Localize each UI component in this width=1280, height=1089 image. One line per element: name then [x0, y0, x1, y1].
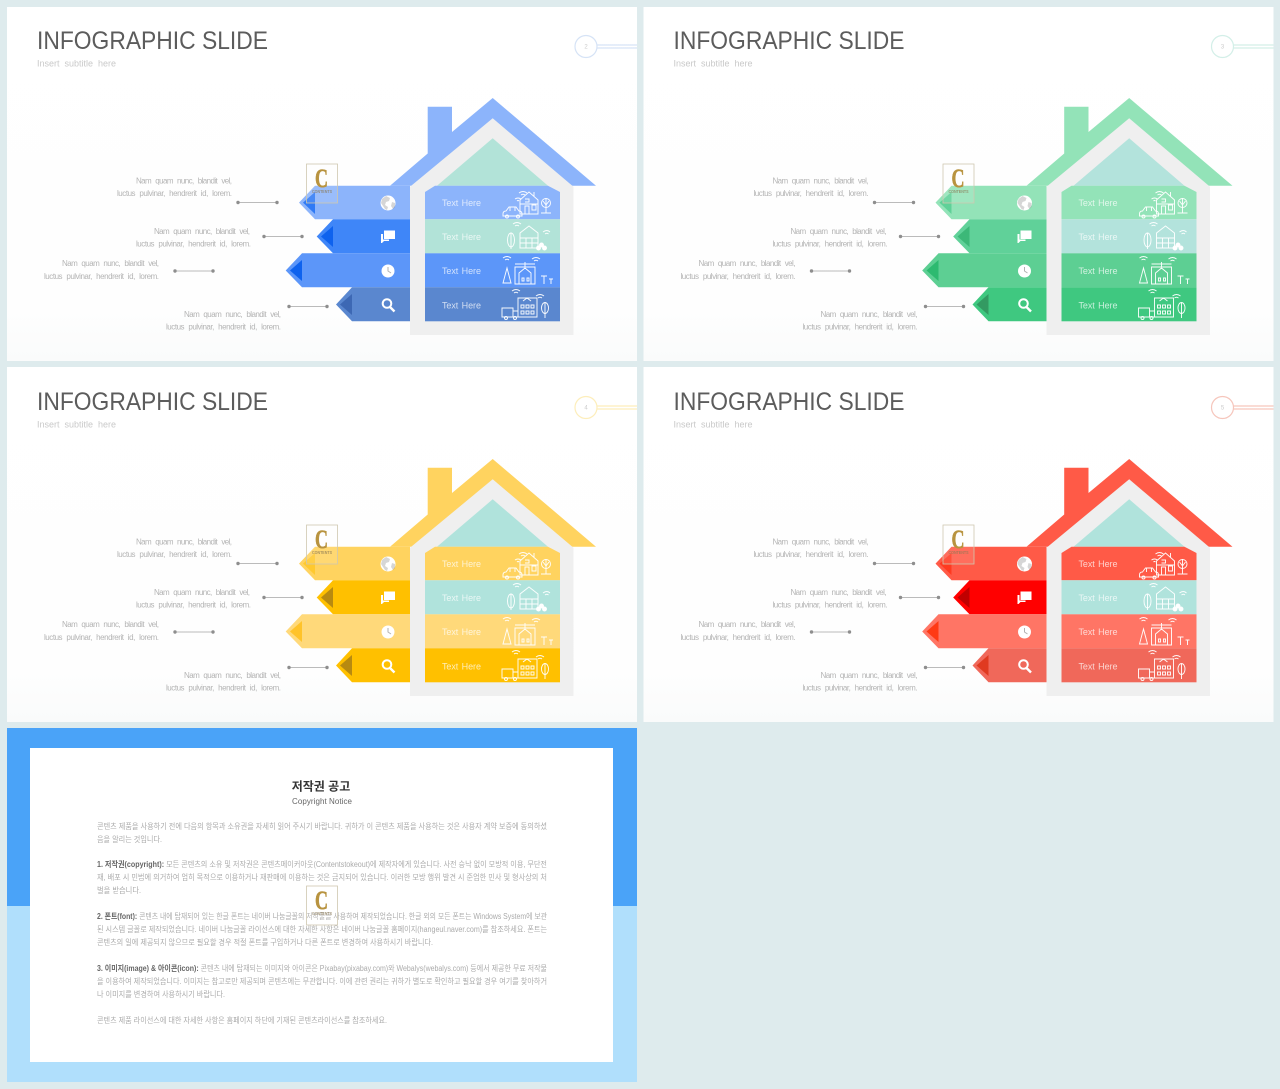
arrow 4: [972, 648, 1046, 682]
watermark badge: [306, 164, 338, 203]
arrow 3: [286, 253, 410, 287]
arrow 2: [953, 580, 1046, 614]
intro paragraph: 음을 알리는 것입니다.: [97, 834, 162, 844]
watermark badge: CONTENTS: [312, 550, 332, 555]
arrow 3: [922, 253, 1046, 287]
house row 3: [1062, 614, 1196, 648]
house row 4: [425, 648, 560, 682]
watermark badge: C: [315, 164, 328, 193]
house row 2: [1062, 580, 1196, 614]
watermark badge: [306, 525, 338, 564]
attic triangle: [1074, 499, 1184, 547]
callout 3: Nam quam nunc, blandit vel,: [62, 620, 159, 629]
attic triangle: [437, 138, 548, 186]
section 1 copyright: 벌을 받습니다.: [97, 885, 141, 895]
copyright heading: 저작권 공고: [292, 778, 350, 794]
house row 2: Text Here: [442, 232, 481, 242]
callout 4: [166, 305, 329, 332]
watermark badge: C: [952, 525, 964, 554]
house row 1: [1062, 547, 1196, 580]
watermark badge: [306, 886, 338, 925]
arrow 4: [336, 648, 410, 682]
subtitle: Insert subtitle here: [37, 58, 116, 68]
panel: blue house slide: [7, 7, 637, 361]
callout 2: luctus pulvinar, hendrerit id, lorem.: [772, 240, 888, 248]
section 2 font: [97, 911, 548, 947]
house row 3: Text Here: [442, 627, 481, 637]
page number marker: [575, 396, 637, 418]
callout 4: luctus pulvinar, hendrerit id, lorem.: [802, 684, 918, 692]
house row 1: Text Here: [1078, 559, 1118, 569]
section 3 image and icon: 나 이미지를 변경하여 사용하시기 바랍니다.: [97, 989, 225, 999]
panel: green house slide: [644, 7, 1274, 361]
page number marker: [1212, 396, 1274, 418]
callout 1: luctus pulvinar, hendrerit id, lorem.: [754, 550, 868, 559]
callout 4: Nam quam nunc, blandit vel,: [820, 671, 918, 680]
house roof and chimney: [390, 98, 596, 186]
panel: copyright notice slide: [7, 728, 637, 1082]
attic triangle: [437, 499, 548, 547]
house wall: [410, 479, 574, 696]
house row 4: Text Here: [442, 300, 481, 310]
house row 3: Text Here: [1078, 627, 1118, 637]
page number marker: 2: [584, 44, 588, 50]
section 1 copyright: 재, 배포 시 민법에 의거하여 엄히 목적으로 이용하거나 재판매에 이용하는 것은 금지되어 있습니다. 이러한 모방 행위 발견 시 준엄한 민사 및 형사상의 처: [97, 872, 547, 882]
house row 4: Text Here: [1078, 300, 1118, 310]
callout 1: luctus pulvinar, hendrerit id, lorem.: [754, 189, 868, 198]
page number marker: 5: [1221, 406, 1225, 412]
arrow 1: [936, 186, 1046, 219]
callout 1: [754, 538, 915, 565]
callout 2: Nam quam nunc, blandit vel,: [154, 588, 250, 597]
house row 3: [425, 253, 560, 287]
callout 3: [44, 259, 215, 281]
callout 4: [802, 305, 965, 332]
house row 4: Text Here: [1078, 662, 1118, 672]
heading: INFOGRAPHIC SLIDE: [37, 388, 268, 416]
house roof and chimney: [1026, 459, 1232, 547]
callout 4: [802, 666, 965, 692]
section 3 image and icon: 3. 이미지(image) & 아이콘(icon): 콘텐츠 내에 탑재되는 이미지와 아이콘은 Pixabay(pixabay.com)와 Webalys(webalys.com) 등에서 제공한 무료 저작물: [97, 963, 547, 973]
callout 2: [136, 588, 304, 610]
intro paragraph: [97, 821, 548, 844]
house row 1: [425, 186, 560, 219]
callout 4: luctus pulvinar, hendrerit id, lorem.: [166, 684, 281, 692]
subtitle: Insert subtitle here: [674, 420, 752, 430]
house row 1: [1062, 186, 1196, 219]
heading: INFOGRAPHIC SLIDE: [674, 27, 904, 55]
watermark badge: CONTENTS: [312, 911, 332, 916]
house row 3: [1062, 253, 1196, 287]
heading: INFOGRAPHIC SLIDE: [674, 388, 904, 416]
callout 1: Nam quam nunc, blandit vel,: [136, 538, 232, 546]
callout 3: [44, 620, 215, 642]
arrow 4: [972, 287, 1046, 321]
watermark badge: C: [315, 886, 328, 915]
house roof and chimney: [390, 459, 596, 547]
watermark badge: CONTENTS: [948, 189, 968, 194]
closing note: 콘텐츠 제품 라이선스에 대한 자세한 사항은 홈페이지 하단에 기재된 콘텐츠라이선스를 참조하세요.: [97, 1015, 387, 1025]
subtitle: Insert subtitle here: [37, 420, 116, 430]
callout 2: Nam quam nunc, blandit vel,: [790, 227, 886, 236]
house row 3: Text Here: [442, 266, 481, 276]
heading: INFOGRAPHIC SLIDE: [37, 27, 268, 55]
section 3 image and icon: [97, 963, 547, 999]
section 2 font: 된 시스템 글꼴로 제작되었습니다. 네이버 나눔글꼴 라이선스에 대한 자세한 사항은 네이버 나눔글꼴 홈페이지(hangeul.naver.com)를 참조하세요. 폰트는: [97, 924, 547, 934]
arrow 3: [286, 614, 410, 648]
callout 3: Nam quam nunc, blandit vel,: [698, 620, 796, 629]
page number marker: [575, 36, 637, 58]
house row 2: [425, 219, 560, 253]
subtitle: Insert subtitle here: [674, 58, 752, 68]
watermark badge: CONTENTS: [312, 189, 332, 194]
watermark badge: C: [952, 164, 964, 193]
callout 1: [754, 176, 915, 204]
house row 3: Text Here: [1078, 266, 1118, 276]
callout 4: Nam quam nunc, blandit vel,: [184, 310, 281, 319]
callout 1: [117, 176, 279, 204]
panel: yellow house slide: [7, 367, 637, 722]
callout 3: luctus pulvinar, hendrerit id, lorem.: [44, 272, 159, 281]
copyright subheading: Copyright Notice: [292, 797, 353, 806]
callout 4: Nam quam nunc, blandit vel,: [184, 671, 281, 680]
callout 4: Nam quam nunc, blandit vel,: [820, 310, 918, 319]
house row 4: Text Here: [442, 662, 481, 672]
house row 1: [425, 547, 560, 580]
house row 2: Text Here: [442, 593, 481, 603]
section 3 image and icon: 을 이용하여 제작되었습니다. 이미지는 참고로만 제공되며 콘텐츠에는 무관합니다. 이에 관련 권리는 귀하가 별도로 확인하고 필요할 경우 여기를 찾아하거: [97, 976, 547, 986]
page number marker: 4: [584, 406, 588, 412]
callout 1: Nam quam nunc, blandit vel,: [772, 176, 868, 186]
house row 2: Text Here: [1078, 593, 1118, 603]
callout 3: [680, 259, 851, 281]
callout 2: Nam quam nunc, blandit vel,: [154, 227, 250, 236]
callout 4: luctus pulvinar, hendrerit id, lorem.: [166, 322, 281, 332]
section 2 font: 콘텐츠의 일에 제공되지 않으므로 필요할 경우 적절 폰트를 구입하거나 다른 폰트로 변경하여 사용하시기 바랍니다.: [97, 937, 433, 947]
house wall: [1046, 479, 1210, 696]
callout 2: Nam quam nunc, blandit vel,: [790, 588, 886, 597]
callout 2: [136, 227, 304, 248]
house row 2: [1062, 219, 1196, 253]
callout 2: [772, 588, 940, 610]
intro paragraph: 콘텐츠 제품을 사용하기 전에 다음의 항목과 소유권을 자세히 읽어 주시기 바랍니다. 귀하가 이 콘텐츠 제품을 사용하는 것은 사용자 계약 보증에 동의하셨: [97, 821, 548, 831]
watermark badge: [943, 164, 974, 203]
panel: red house slide: [644, 367, 1274, 722]
callout 3: luctus pulvinar, hendrerit id, lorem.: [680, 633, 796, 642]
house row 3: [425, 614, 560, 648]
page number marker: 3: [1221, 44, 1225, 50]
callout 1: luctus pulvinar, hendrerit id, lorem.: [117, 189, 232, 198]
arrow 3: [922, 614, 1046, 648]
callout 3: luctus pulvinar, hendrerit id, lorem.: [680, 272, 796, 281]
watermark badge: CONTENTS: [948, 550, 968, 555]
callout 3: Nam quam nunc, blandit vel,: [62, 259, 159, 268]
watermark badge: C: [315, 525, 328, 554]
house row 1: Text Here: [442, 198, 481, 208]
arrow 4: [336, 287, 410, 321]
callout 2: [772, 227, 940, 248]
arrow 1: [299, 186, 410, 219]
house row 1: Text Here: [442, 559, 481, 569]
callout 2: luctus pulvinar, hendrerit id, lorem.: [772, 600, 888, 610]
watermark badge: [943, 525, 974, 564]
arrow 1: [299, 547, 410, 580]
callout 1: luctus pulvinar, hendrerit id, lorem.: [117, 550, 232, 559]
house row 2: [425, 580, 560, 614]
callout 3: Nam quam nunc, blandit vel,: [698, 259, 796, 268]
arrow 1: [936, 547, 1046, 580]
section 1 copyright: [97, 859, 547, 895]
page number marker: [1212, 36, 1274, 58]
callout 2: luctus pulvinar, hendrerit id, lorem.: [136, 240, 251, 248]
house row 4: [425, 287, 560, 321]
arrow 2: [317, 580, 410, 614]
house wall: [1046, 118, 1210, 335]
house row 4: [1062, 287, 1196, 321]
house row 4: [1062, 648, 1196, 682]
callout 4: [166, 666, 329, 692]
callout 4: luctus pulvinar, hendrerit id, lorem.: [802, 322, 918, 332]
house row 2: Text Here: [1078, 232, 1118, 242]
section 1 copyright: 1. 저작권(copyright): 모든 콘텐츠의 소유 및 저작권은 콘텐츠메이커아웃(Contentstokeout)에 제작자에게 있습니다. 사전 승낙 없이 모방적 이용, 무단전: [97, 859, 547, 869]
callout 1: Nam quam nunc, blandit vel,: [136, 176, 232, 186]
house roof and chimney: [1026, 98, 1232, 186]
house wall: [410, 118, 574, 335]
callout 2: luctus pulvinar, hendrerit id, lorem.: [136, 600, 251, 610]
house row 1: Text Here: [1078, 198, 1118, 208]
attic triangle: [1074, 138, 1184, 186]
callout 3: [680, 620, 851, 642]
arrow 2: [953, 219, 1046, 253]
callout 1: Nam quam nunc, blandit vel,: [772, 538, 868, 546]
callout 1: [117, 538, 279, 565]
section 2 font: 2. 폰트(font): 콘텐츠 내에 탑재되어 있는 한글 폰트는 네이버 나눔글꼴의 저작물을 사용하여 제작되었습니다. 한글 외의 모든 폰트는 Windows System에 보관: [97, 911, 548, 921]
callout 3: luctus pulvinar, hendrerit id, lorem.: [44, 633, 159, 642]
arrow 2: [317, 219, 410, 253]
